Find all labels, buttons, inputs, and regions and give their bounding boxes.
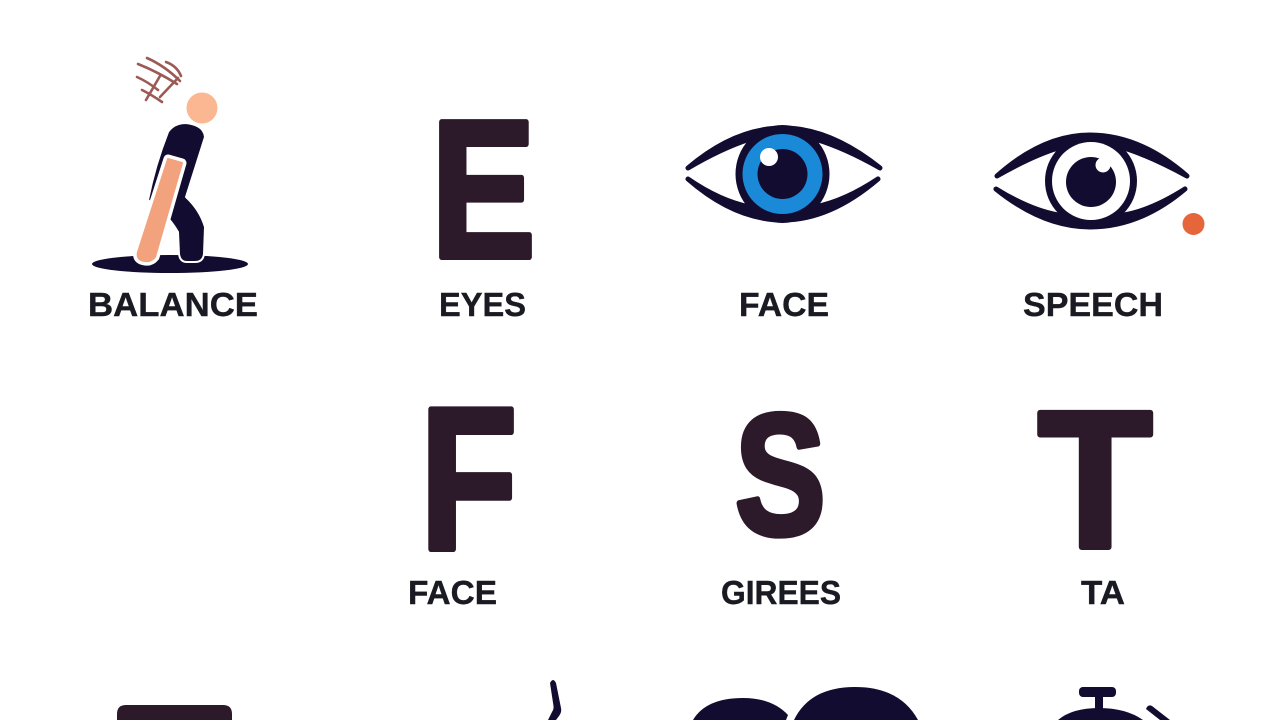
icon: cropped squiggle <box>548 680 561 720</box>
cropped bar: top of bottom-row shape <box>117 705 232 720</box>
icon: cropped stopwatch <box>1058 687 1170 720</box>
label: eyes: EYES <box>439 286 526 323</box>
label: ta: TA <box>1081 574 1125 611</box>
letter: E: E <box>431 79 536 299</box>
label: girees: GIREES <box>721 574 841 611</box>
icon: cropped heart humps <box>693 687 918 720</box>
icon: blue eye <box>688 125 880 223</box>
letter: F: F <box>420 365 517 592</box>
icon: balance figure <box>92 58 248 273</box>
letter: T: T <box>1038 371 1152 589</box>
label: balance: BALANCE <box>88 286 258 323</box>
label: face: FACE <box>739 286 829 323</box>
icon: outlined eye <box>996 135 1187 227</box>
label: speech: SPEECH <box>1023 286 1163 323</box>
icon: orange dot <box>1182 213 1204 235</box>
label: face second row: FACE <box>408 574 497 611</box>
letter: S: S <box>735 379 826 571</box>
